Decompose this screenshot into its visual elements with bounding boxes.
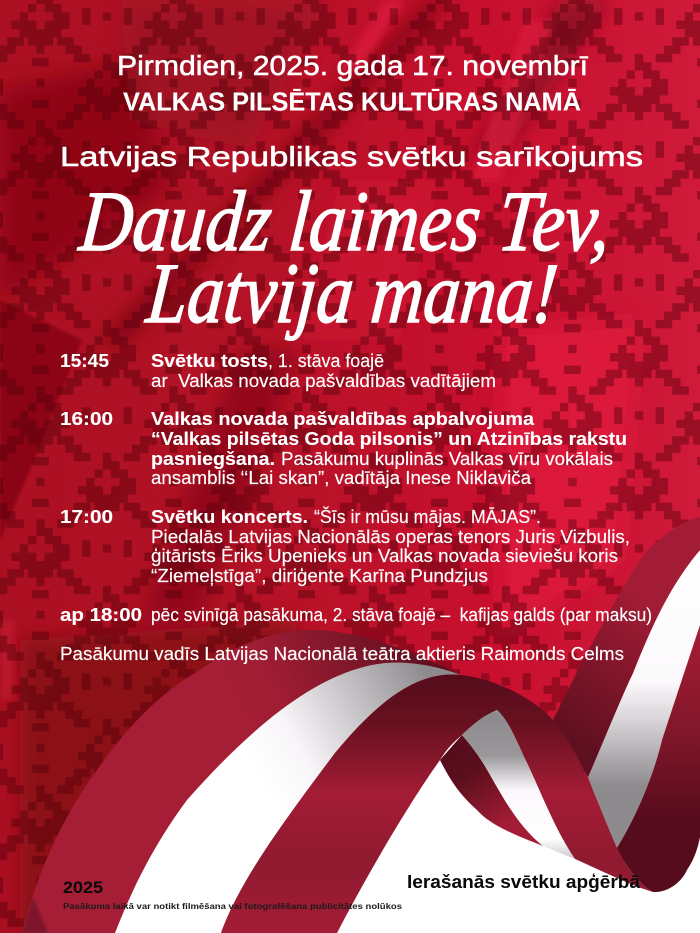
heading: venue: VALKAS PILSĒTAS KULTŪRAS NAMĀ bbox=[123, 88, 581, 116]
schedule: 17:00 concert: Piedalās Latvijas Nacionālās operas tenors Juris Vizbulis, bbox=[151, 527, 630, 547]
footer: year: 2025 bbox=[63, 879, 103, 897]
ribbon: left outer red band bbox=[22, 630, 461, 933]
ribbon: inner white strip bbox=[462, 710, 575, 859]
footer: dress code: Ierašanās svētku apģērbā bbox=[407, 871, 641, 892]
ribbon: dark corner of outer band bbox=[22, 897, 48, 933]
ribbon: right lower red band bbox=[617, 625, 700, 892]
schedule: 16:00 award ceremony: pasniegšana. bbox=[151, 449, 275, 469]
schedule: 17:00 concert: “Šīs ir mūsu mājas. MĀJAS”. bbox=[314, 506, 541, 527]
schedule: 15:45 toast bbox=[60, 351, 496, 391]
schedule: 17:00 concert: “Ziemeļstīga”, diriģente Karīna Pundzjus bbox=[151, 566, 488, 586]
heading: date: Pirmdien, 2025. gada 17. novembrī bbox=[117, 50, 588, 81]
schedule: 18:00 coffee table: pēc svinīgā pasākuma, 2. stāva foajē – kafijas galds (par maksu) bbox=[151, 605, 652, 625]
title: script slogan bbox=[76, 173, 615, 341]
white ground under ribbon bbox=[320, 700, 700, 933]
schedule: 17:00 concert: ģitārists Ēriks Upenieks un Valkas novada sieviešu koris bbox=[151, 546, 618, 566]
ribbon: right white band bbox=[588, 550, 700, 848]
schedule: 15:45 toast: 15:45 bbox=[60, 351, 109, 371]
ribbon: inner lower red strip bbox=[440, 735, 543, 846]
schedule: 15:45 toast: ar Valkas novada pašvaldības vadītājiem bbox=[151, 371, 496, 391]
ribbon: Latvian flag ribbon bbox=[22, 517, 700, 933]
ribbon: left white band bbox=[115, 663, 461, 933]
footer: filming notice: Pasākuma laikā var notikt filmēšana vai fotografēšana publicitātes nolūkos bbox=[63, 902, 403, 911]
schedule: 16:00 award ceremony: Valkas novada pašvaldības apbalvojuma bbox=[151, 409, 535, 429]
schedule: 16:00 award ceremony: 16:00 bbox=[60, 409, 113, 429]
schedule: 17:00 concert: 17:00 bbox=[60, 507, 113, 527]
schedule: 18:00 coffee table: ap 18:00 bbox=[60, 605, 142, 625]
schedule: 16:00 award ceremony: Pasākumu kuplinās Valkas vīru vokālais bbox=[281, 449, 613, 469]
schedule: 17:00 concert bbox=[60, 506, 630, 586]
schedule: 15:45 toast: , 1. stāva foajē bbox=[268, 351, 384, 371]
ribbon: right upper red band bbox=[553, 517, 700, 777]
schedule: 16:00 award ceremony bbox=[60, 409, 627, 488]
schedule: 16:00 award ceremony: “Valkas pilsētas Goda pilsonis” un Atzinības rakstu bbox=[151, 429, 627, 449]
host line: Pasākumu vadīs Latvijas Nacionālā teātra aktieris Raimonds Celms bbox=[60, 644, 624, 664]
schedule: 16:00 award ceremony: ansamblis ‘‘Lai skan”, vadītāja Inese Niklaviča bbox=[151, 468, 532, 488]
title: script slogan: Latvija mana! bbox=[142, 245, 562, 341]
ribbon: main red band with crest and curl bbox=[221, 675, 653, 933]
heading: event name: Latvijas Republikas svētku sarīkojums bbox=[60, 141, 643, 172]
title: script slogan: Daudz laimes Tev, bbox=[76, 173, 615, 269]
schedule: 17:00 concert: Svētku koncerts. bbox=[151, 507, 308, 527]
schedule: 15:45 toast: Svētku tosts bbox=[151, 351, 268, 371]
